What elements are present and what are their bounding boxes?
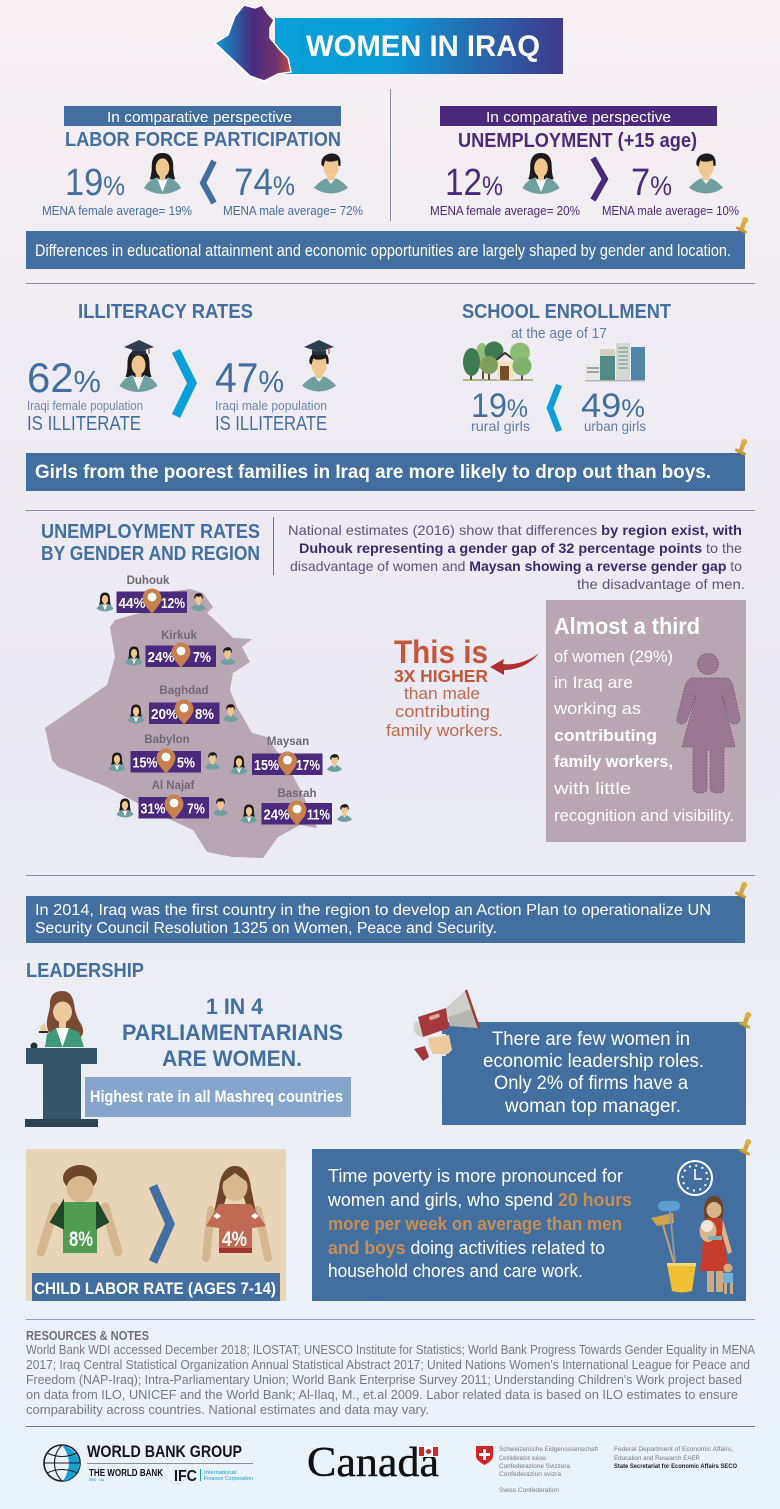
region: Maysan: 17% <box>296 758 320 774</box>
region: Maysan: Maysan <box>267 736 309 748</box>
logo: World Bank Group: THE WORLD BANK <box>89 1468 164 1479</box>
heading: unemployment rates by gender and region: BY GENDER AND REGION <box>41 542 260 565</box>
rural caption: rural girls <box>471 418 530 434</box>
icon: female graduate <box>120 340 158 392</box>
callout: action plan 2014: Security Council Resolution 1325 on Women, Peace and Security. <box>35 920 497 937</box>
icon: woman <box>522 153 560 194</box>
region: Kirkuk: 7% <box>193 650 211 666</box>
logo: Canada: Canada <box>307 1440 439 1486</box>
notes: on data from ILO, UNICEF and the World Bank; Al-Ilaq, M., et.al 2009. Labor related data is based on ILO estimates to ensure <box>26 1387 738 1402</box>
arrow: less than <box>550 385 559 431</box>
female average: MENA female average= 20% <box>430 204 580 218</box>
region: Al Najaf: 7% <box>187 802 205 818</box>
text block: in Iraq are <box>554 673 633 692</box>
region: Babylon: Babylon <box>144 734 190 746</box>
heading: ILLITERACY RATES <box>78 300 253 323</box>
text block: national estimates: disadvantage of women and Maysan showing a reverse gender gap to <box>290 558 742 574</box>
female average: MENA female average= 19% <box>42 204 192 218</box>
panel: almost a third <box>546 600 746 842</box>
text block: and boys doing activities related to <box>328 1238 605 1258</box>
panel: labor force participation <box>42 106 363 218</box>
icon: mother, baby, child and cleaning tools <box>651 1196 733 1294</box>
names <box>499 1446 598 1494</box>
text block: of women (29%) <box>554 647 673 666</box>
callout: poorest families <box>26 439 747 491</box>
region: Baghdad: Baghdad <box>159 685 209 697</box>
text block: women and girls, who spend 20 hours <box>327 1190 632 1210</box>
region: Babylon: 5% <box>177 756 195 772</box>
stat: 1 in 4 parliamentarians: ARE WOMEN. <box>162 1046 302 1071</box>
description: family workers. <box>386 721 503 740</box>
text block: national estimates: Duhouk representing a gender gap of 32 percentage points to the <box>299 540 742 556</box>
text block: contributing <box>554 726 657 745</box>
region: Baghdad <box>127 685 238 725</box>
female caption: Iraqi female population <box>27 399 143 413</box>
region: Duhouk: 44% <box>118 596 146 612</box>
arrow: greater than <box>593 158 605 200</box>
subheading bar <box>64 106 341 126</box>
subheading bar <box>440 106 717 126</box>
this is: This is <box>394 634 488 670</box>
icon: boy <box>41 1165 118 1253</box>
region: Duhouk <box>96 575 206 614</box>
logo: World Bank Group: IBRD · IDA <box>89 1478 105 1482</box>
region: Al Najaf: Al Najaf <box>152 780 195 792</box>
female stat: 62% <box>27 354 101 401</box>
subheading text: In comparative perspective <box>107 109 292 126</box>
region: Al Najaf <box>116 780 228 820</box>
stat: 1 in 4 parliamentarians: PARLIAMENTARIANS <box>122 1020 343 1045</box>
icon: megaphone <box>412 990 479 1061</box>
arrow: less than <box>203 161 214 203</box>
callout: economic leadership: There are few women in <box>492 1029 690 1050</box>
panel: illiteracy rates <box>27 300 336 435</box>
description <box>386 684 503 740</box>
icon: man <box>689 154 723 193</box>
text block: national estimates: the disadvantage of men. <box>577 576 745 592</box>
arrow: greater than <box>153 1186 170 1262</box>
names: Confederaziun svizra <box>499 1471 561 1478</box>
heading: SCHOOL ENROLLMENT <box>462 300 671 323</box>
callout: 3x higher <box>386 634 539 740</box>
stat: 1 in 4 parliamentarians <box>122 994 343 1071</box>
region: Basrah: Basrah <box>278 788 316 800</box>
department <box>614 1446 737 1470</box>
icon: woman silhouette <box>677 654 740 793</box>
logo: World Bank Group: IFC <box>174 1468 197 1485</box>
region: Al Najaf: 31% <box>140 802 166 818</box>
region: Baghdad: 8% <box>195 707 214 723</box>
region: Basrah: 24% <box>264 808 290 824</box>
heading: UNEMPLOYMENT (+15 age) <box>458 130 697 152</box>
icon: Iraq outline <box>45 589 317 858</box>
text block: with little <box>553 779 631 798</box>
region: Maysan: 15% <box>254 758 279 774</box>
male average: MENA male average= 72% <box>223 204 363 218</box>
names: Swiss Confederation <box>499 1487 559 1494</box>
callout: poorest families: Girls from the poorest families in Iraq are more likely to drop out than boys. <box>35 462 711 483</box>
male label: IS ILLITERATE <box>215 413 327 435</box>
map: unemployment by region <box>45 575 352 858</box>
icon: woman at podium <box>25 991 98 1127</box>
region: Duhouk: 12% <box>161 596 185 612</box>
text block: more per week on average than men <box>328 1214 622 1234</box>
arrow <box>490 653 539 675</box>
heading: RESOURCES & NOTES <box>26 1328 149 1343</box>
heading: LABOR FORCE PARTICIPATION <box>65 129 341 151</box>
text block: household chores and care work. <box>328 1261 583 1281</box>
male stat: 74% <box>234 162 295 204</box>
region: Baghdad: 20% <box>151 707 178 723</box>
department: Federal Department of Economic Affairs, <box>614 1446 733 1453</box>
text block: Time poverty is more pronounced for <box>328 1166 623 1186</box>
heading: Almost a third <box>554 613 700 639</box>
stat: girls 4%: 4% <box>222 1228 247 1251</box>
text block: recognition and visibility. <box>554 806 734 825</box>
description: than male <box>404 684 480 703</box>
region: Babylon: 15% <box>132 756 158 772</box>
text block <box>553 647 734 825</box>
names: Confederazione Svizzera <box>499 1463 570 1470</box>
region: Duhouk: Duhouk <box>127 575 170 587</box>
male stat: 7% <box>631 162 672 204</box>
stat: boys 8%: 8% <box>69 1228 93 1251</box>
region: Kirkuk: Kirkuk <box>161 630 197 642</box>
subheading text: In comparative perspective <box>486 109 671 126</box>
text block: national estimates: National estimates (2016) show that differences by region exist, with <box>288 522 742 538</box>
icon: girl <box>206 1166 268 1258</box>
callout: action plan 2014 <box>26 882 747 943</box>
icon: Iraq map <box>215 5 291 81</box>
callout: highest rate: Highest rate in all Mashreq countries <box>90 1087 343 1106</box>
icon: clock <box>678 1161 712 1195</box>
icon: male graduate <box>302 340 336 391</box>
heading: unemployment rates by gender and region <box>41 520 260 565</box>
logo: World Bank Group: International <box>204 1470 236 1476</box>
banner background <box>275 18 563 74</box>
text block: family workers, <box>554 752 673 771</box>
department: Education and Research EAER <box>614 1455 700 1462</box>
title: WOMEN IN IRAQ <box>306 30 540 63</box>
region: Basrah <box>240 788 352 826</box>
subheading: at the age of 17 <box>511 325 607 342</box>
region: Kirkuk <box>125 630 235 668</box>
region: Kirkuk: 24% <box>148 650 175 666</box>
female stat: 19% <box>65 162 125 204</box>
urban caption: urban girls <box>584 418 646 434</box>
icon: rural house and trees <box>463 342 533 381</box>
stat: 1 in 4 parliamentarians: 1 IN 4 <box>206 994 264 1019</box>
heading: unemployment rates by gender and region: UNEMPLOYMENT RATES <box>41 520 260 543</box>
male average: MENA male average= 10% <box>602 204 739 218</box>
title banner <box>215 5 563 81</box>
logo: World Bank Group: WORLD BANK GROUP <box>87 1442 242 1461</box>
names: Confédération suisse <box>499 1455 546 1462</box>
description: contributing <box>395 702 490 721</box>
notes: comparability across countries. National estimates and data may vary. <box>26 1402 429 1417</box>
female stat: 12% <box>445 162 503 204</box>
logo: World Bank Group <box>44 1442 253 1485</box>
panel: school enrollment <box>462 300 671 434</box>
region: Babylon <box>108 734 220 774</box>
callout: action plan 2014: In 2014, Iraq was the first country in the region to develop an Action Plan to operationalize UN <box>35 902 711 919</box>
urban stat: 49% <box>581 387 645 425</box>
heading: leadership: LEADERSHIP <box>26 960 144 982</box>
label text: CHILD LABOR RATE (AGES 7-14) <box>34 1279 276 1298</box>
icon: urban buildings <box>585 343 645 382</box>
icon: woman <box>144 153 181 194</box>
names: Schweizerische Eidgenossenschaft <box>499 1446 598 1453</box>
male caption: Iraqi male population <box>215 399 327 413</box>
panel: child labor rate <box>26 1149 286 1301</box>
callout: economic leadership: economic leadership roles. <box>483 1051 704 1072</box>
callout: gender and location <box>26 217 748 269</box>
panel: time poverty <box>312 1139 751 1301</box>
label bar <box>32 1273 280 1301</box>
rural stat: 19% <box>471 387 528 425</box>
callout: highest rate <box>85 1077 351 1117</box>
panel: unemployment <box>430 106 739 218</box>
arrow: greater than <box>176 351 192 416</box>
text block <box>327 1166 632 1281</box>
region: Maysan <box>230 736 342 777</box>
notes <box>26 1342 755 1417</box>
callout: economic leadership <box>442 1012 751 1125</box>
text block: resources and notes <box>26 1328 755 1417</box>
3x higher: 3X HIGHER <box>394 666 488 686</box>
icon: man <box>314 154 348 193</box>
callout: economic leadership: woman top manager. <box>504 1096 681 1117</box>
male stat: 47% <box>215 354 284 401</box>
department: State Secretariat for Economic Affairs SECO <box>614 1463 737 1470</box>
logo: Swiss Confederation <box>476 1446 737 1494</box>
icon: Swiss shield <box>476 1446 493 1465</box>
female label: IS ILLITERATE <box>27 413 141 435</box>
callout: economic leadership: Only 2% of firms have a <box>494 1073 688 1094</box>
text block: working as <box>553 699 641 718</box>
region: Basrah: 11% <box>307 808 330 824</box>
notes: Freedom (NAP-Iraq); Intra-Parliamentary Union; World Bank Enterprise Survey 2011; Understanding Children's Work project based <box>26 1372 742 1387</box>
text block: national estimates <box>288 522 745 592</box>
logo: World Bank Group: Finance Corporation <box>204 1476 253 1482</box>
